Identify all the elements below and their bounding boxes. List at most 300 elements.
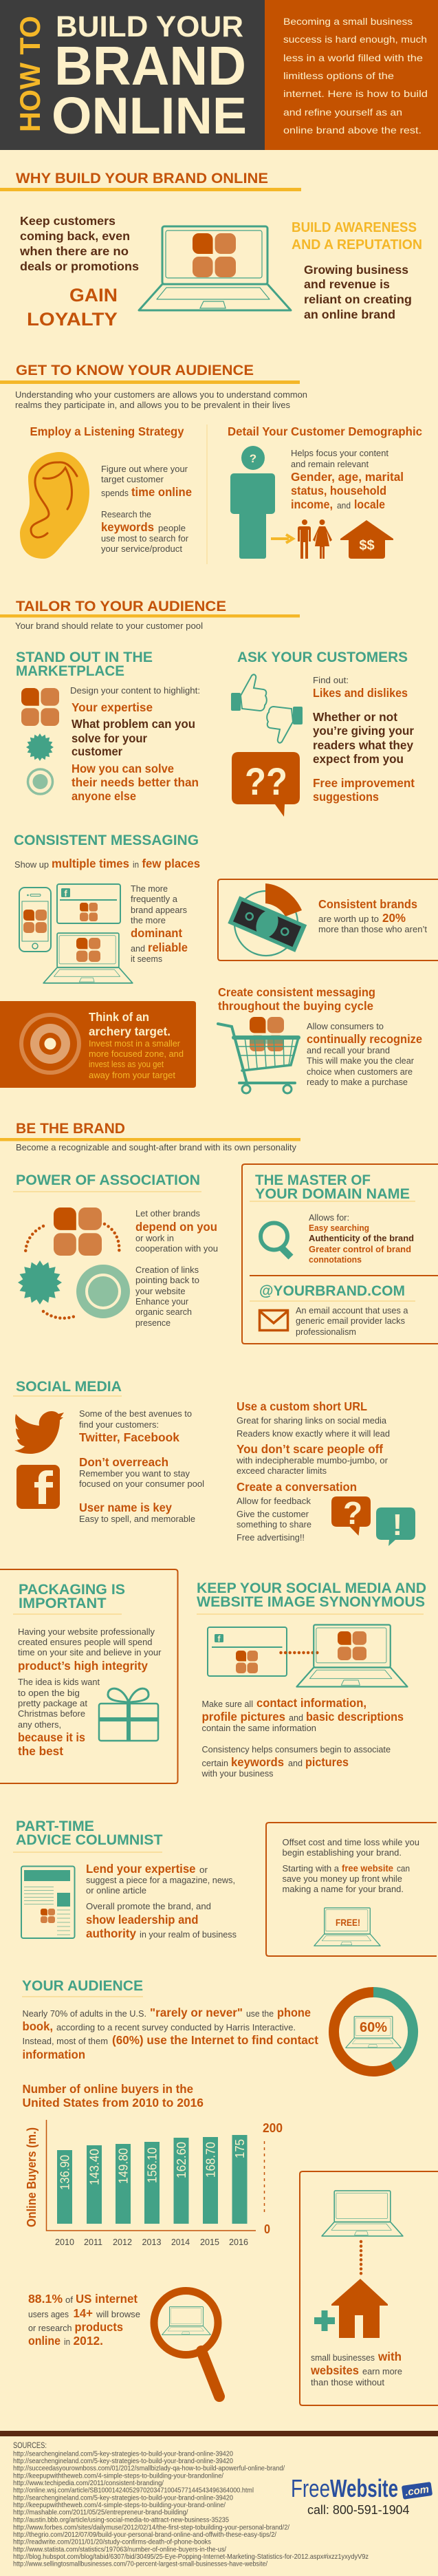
- sources list: http://www.statista.com/statistics/197063/number-of-online-buyers-in-the-us/: [13, 2545, 226, 2553]
- title: build your brand online: [52, 10, 247, 144]
- icon: envelope: [259, 1310, 288, 1331]
- text: ask customers: suggestions: [313, 790, 379, 804]
- text: stand out: customer: [72, 744, 122, 758]
- section: get to know your audience: [0, 363, 422, 564]
- heading: PACKAGING IS: [19, 1582, 125, 1598]
- text: social avenues: Easy to spell, and memorable: [79, 1514, 195, 1524]
- footer: [0, 2431, 438, 2568]
- icon: person with question mark: ?: [250, 452, 256, 465]
- logo: freewebsite.com: .com: [404, 2484, 430, 2498]
- text: growing business: an online brand: [304, 308, 395, 321]
- intro text: limitless options of the: [283, 70, 394, 81]
- text: social avenues: Twitter, Facebook: [79, 1430, 179, 1444]
- sources list: http://searchengineland.com/5-key-strategies-to-build-your-brand-online-39420: [13, 2493, 233, 2502]
- chart heading: [22, 2082, 204, 2110]
- intro text: Understanding who your customers are allows you to understand common: [15, 389, 307, 400]
- sources list: http://blog.hubspot.com/blog/tabid/6307/bid/30495/25-Eye-Popping-Internet-Marketing-Statistics-for-2012.aspx#ixzz1yxydyV9z: [13, 2553, 369, 2561]
- text: stand out: Design your content to highlight:: [70, 685, 200, 696]
- sources list: http://www.sellingtosmallbusinesses.com/70-percent-largest-small-businesses-have-website/: [13, 2560, 267, 2568]
- panel: small business websites: [300, 2171, 438, 2405]
- bar chart: online buyers: [25, 2120, 283, 2247]
- text: custom url and conversation: something to share: [237, 1519, 311, 1530]
- text: advice: [86, 1862, 237, 1940]
- sources list: http://www.techipedia.com/2011/consistent-branding/: [13, 2479, 164, 2487]
- connector dots: [360, 2242, 362, 2274]
- text: packaging: created ensures people will spend: [18, 1637, 153, 1647]
- text: archery: archery target.: [89, 1024, 171, 1038]
- text: packaging: product’s high integrity: [18, 1659, 148, 1673]
- years: [55, 2237, 248, 2247]
- intro text: success is hard enough, much: [283, 34, 427, 45]
- text: phone book stat: Nearly 70% of adults in the U.S.: [22, 2008, 146, 2019]
- text: association: presence: [135, 1318, 171, 1328]
- text: ask customers: [313, 675, 415, 804]
- text: ask customers: Free improvement: [313, 776, 415, 790]
- icon: newspaper: [21, 1866, 74, 1938]
- text: ask customers: readers what they: [313, 738, 413, 752]
- text: consistent brands: more than those who aren’t: [318, 924, 427, 934]
- icon: logo connected to partners: [18, 1208, 125, 1318]
- years: 2013: [142, 2237, 161, 2247]
- icon: magnifying glass: [261, 1223, 291, 1257]
- connector dots: [281, 1651, 318, 1654]
- text: gain loyalty: GAIN: [69, 285, 118, 305]
- sources list: SOURCES:: [13, 2442, 47, 2450]
- text: listening strategy: use most to search for: [101, 533, 189, 544]
- years: 2010: [55, 2237, 74, 2247]
- sources list: http://austin.bbb.org/article/using-social-media-to-attract-new-business-35235: [13, 2516, 229, 2524]
- text: internet users stat: US internet: [76, 2292, 138, 2306]
- icon: facebook window: f: [217, 1634, 221, 1644]
- icon: laptop: [322, 2191, 403, 2236]
- text: internet users stat: will browse: [96, 2309, 140, 2319]
- text: phone book stat: (60%) use the Internet to find contact: [112, 2033, 318, 2047]
- text: custom url and conversation: Readers know exactly where it will lead: [237, 1428, 390, 1439]
- text: phone book stat: book,: [22, 2019, 53, 2033]
- icon: thumbs up: [231, 674, 267, 711]
- text: free website: Starting with a: [282, 1863, 340, 1874]
- header panel: [0, 0, 438, 150]
- icon: question bubble: ?: [343, 1495, 362, 1531]
- intro text: Become a recognizable and sought-after brand with its own personality: [16, 1142, 296, 1152]
- heading: buying cycle: [218, 985, 375, 1013]
- icon: twitter bird: [14, 1411, 64, 1454]
- icon: facebook window: f: [64, 888, 67, 899]
- text: listening strategy: your service/product: [101, 544, 182, 554]
- text: demographic: locale: [354, 497, 385, 511]
- sources list: http://readwrite.com/2011/01/20/study-confirms-death-of-phone-books: [13, 2538, 211, 2546]
- heading: buying cycle: Create consistent messaging: [218, 985, 375, 999]
- text: custom url and conversation: You don’t scare people off: [237, 1442, 383, 1456]
- text: phone book stat: phone: [277, 2006, 311, 2019]
- chart heading: Number of online buyers in the: [22, 2082, 193, 2096]
- chart: 60 percent donut: 60%: [360, 2020, 387, 2035]
- panel: domain name: [242, 1164, 438, 1344]
- text: listening strategy: spends: [101, 488, 129, 498]
- text: frequency: frequently a: [131, 894, 178, 904]
- text: social avenues: Some of the best avenues to: [79, 1408, 192, 1419]
- text: listening strategy: Figure out where your: [101, 464, 188, 474]
- text: same information: contain the same information: [202, 1723, 316, 1733]
- text: same information: profile pictures: [202, 1710, 285, 1724]
- heading: WEBSITE IMAGE SYNONYMOUS: [197, 1594, 425, 1610]
- panel: consistent brands: [218, 879, 438, 960]
- text: stand out: [70, 685, 200, 803]
- text: same information: pictures: [305, 1755, 349, 1769]
- text: allows for: [309, 1212, 414, 1265]
- heading: [197, 1580, 426, 1610]
- icon: phone: [19, 888, 51, 952]
- heading: domain: YOUR DOMAIN NAME: [255, 1186, 410, 1202]
- heading: [19, 1582, 125, 1611]
- heading: domain: [255, 1172, 410, 1202]
- text: social avenues: focused on your consumer pool: [79, 1479, 204, 1489]
- years: 2011: [84, 2237, 102, 2247]
- text: listening strategy: target customer: [101, 474, 164, 484]
- text: buying cycle: and recall your brand: [307, 1045, 390, 1055]
- text: internet users stat: users ages: [28, 2309, 69, 2319]
- icon: ear: [20, 452, 89, 559]
- text: phone book stat: according to a recent survey conducted by Harris Interactive.: [56, 2022, 296, 2032]
- text: same information: [201, 1696, 404, 1779]
- heading: stand out: [16, 650, 153, 679]
- section: consistent messaging: [0, 833, 438, 1093]
- text: same information: basic descriptions: [306, 1710, 404, 1724]
- text: advice: in your realm of business: [140, 1929, 237, 1940]
- text: gain loyalty: LOYALTY: [27, 309, 118, 330]
- sources list: http://searchengineland.com/5-key-strategies-to-build-your-brand-online-39420: [13, 2457, 233, 2465]
- subheading: listening: Employ a Listening Strategy: [30, 425, 184, 438]
- text: allows for: connotations: [309, 1254, 362, 1265]
- title: build your brand online: BUILD YOUR: [56, 10, 243, 43]
- text: free website: begin establishing your brand.: [282, 1847, 402, 1858]
- icon: laptop free: [314, 1908, 380, 1946]
- text: custom url and conversation: Give the customer: [237, 1509, 309, 1519]
- text: social avenues: Remember you want to stay: [79, 1468, 190, 1479]
- years: 2012: [113, 2237, 132, 2247]
- text: social avenues: User name is key: [79, 1501, 172, 1514]
- heading: CONSISTENT MESSAGING: [14, 833, 199, 848]
- text: consistent brands: Consistent brands: [318, 897, 417, 911]
- heading: PART-TIME: [16, 1818, 94, 1834]
- icon: house with money: $$: [359, 538, 375, 553]
- text: frequency: [131, 883, 188, 964]
- text: frequency: dominant: [131, 926, 182, 940]
- icon: shopping cart with logo: [218, 1017, 298, 1093]
- icon: laptop: [43, 933, 133, 983]
- intro text: and refine yourself as an: [283, 107, 402, 118]
- text: stand out: How you can solve: [72, 762, 174, 775]
- text: buying cycle: ready to make a purchase: [307, 1077, 408, 1087]
- icon: exclamation bubble: !: [393, 1508, 402, 1542]
- years: 2016: [229, 2237, 248, 2247]
- subheading: [14, 857, 200, 870]
- text: small businesses: with: [377, 2350, 402, 2363]
- text: demographic: Helps focus your content: [291, 448, 388, 458]
- intro text: Becoming a small business: [283, 16, 413, 27]
- text: buying cycle: This will make you the clear: [307, 1055, 415, 1066]
- text: same information: Make sure all: [202, 1699, 253, 1709]
- text: listening strategy: keywords: [101, 520, 154, 534]
- intro text: online brand above the rest.: [283, 125, 421, 136]
- text: custom url and conversation: Create a conversation: [237, 1480, 357, 1494]
- text: association: cooperation with you: [135, 1243, 218, 1254]
- section: your audience: [22, 1978, 438, 2405]
- icon: house with plus: [314, 2279, 388, 2338]
- heading: BE THE BRAND: [16, 1121, 125, 1137]
- text: frequency: it seems: [131, 954, 162, 964]
- text: packaging: [18, 1627, 162, 1758]
- text: packaging: The idea is kids want: [18, 1677, 100, 1687]
- text: free website: Offset cost and time loss while you: [282, 1837, 419, 1847]
- icon: gift box: [98, 1688, 158, 1741]
- icon: question speech bubble: [232, 752, 300, 817]
- bar values: 136.90: [58, 2155, 72, 2190]
- text: phone book stat: information: [22, 2048, 85, 2061]
- text: internet users stat: products: [74, 2320, 123, 2334]
- sources list: http://searchengineland.com/5-key-strategies-to-build-your-brand-online-39420: [13, 2449, 233, 2458]
- text: listening strategy: Research the: [101, 509, 151, 519]
- text: association: depend on you: [135, 1220, 217, 1234]
- text: build awareness: [292, 220, 422, 253]
- chart: 60 percent donut: [334, 1993, 413, 2071]
- heading: stand out: MARKETPLACE: [16, 663, 124, 679]
- text: listening strategy: people: [158, 523, 186, 533]
- text: custom url and conversation: exceed character limits: [237, 1466, 327, 1476]
- text: archery: Invest most in a smaller: [89, 1038, 181, 1049]
- bar values: 149.80: [117, 2148, 131, 2184]
- text: allows for: Easy searching: [309, 1223, 369, 1233]
- bar values: 143.40: [88, 2149, 102, 2185]
- text: demographic: status, household: [291, 484, 386, 497]
- text: growing business: [304, 263, 412, 321]
- text: association: pointing back to: [135, 1275, 199, 1285]
- text: stand out: their needs better than: [72, 775, 199, 789]
- text: association: Enhance your: [135, 1296, 189, 1307]
- text: advice: show leadership and: [86, 1913, 198, 1926]
- text: consistent brands: are worth up to: [318, 914, 379, 924]
- sources list: http://keepupwiththeweb.com/4-simple-steps-to-building-your-brand-online/: [13, 2501, 226, 2509]
- bar values: 162.60: [175, 2142, 188, 2178]
- text: buying cycle: Allow consumers to: [307, 1021, 384, 1031]
- text: ask customers: you’re giving your: [313, 724, 414, 738]
- text: internet users stat: [28, 2292, 140, 2348]
- text: allows for: Authenticity of the brand: [309, 1233, 414, 1243]
- text: phone book stat: Instead, most of them: [22, 2036, 108, 2046]
- text: keep customers: [19, 214, 139, 273]
- text: same information: and: [288, 1758, 303, 1768]
- logo: freewebsite.com: Free: [291, 2474, 330, 2502]
- text: packaging: to open the big: [18, 1688, 80, 1698]
- text: email: professionalism: [296, 1327, 356, 1337]
- text: listening strategy: [101, 464, 192, 554]
- text: free website: free website: [342, 1863, 393, 1874]
- text: free website: making a name for your brand.: [282, 1884, 404, 1894]
- intro text: less in a world filled with the: [283, 52, 423, 63]
- years: 2014: [171, 2237, 190, 2247]
- arrow: [271, 535, 293, 543]
- scale: 200: [263, 2121, 283, 2135]
- sources list: http://online.wsj.com/article/SB10001424052970203471004577144543496364000.html: [13, 2487, 254, 2495]
- intro text: [283, 16, 428, 136]
- text: custom url and conversation: Free advertising!!: [237, 1532, 305, 1543]
- text: internet users stat: 14+: [73, 2306, 93, 2320]
- text: social avenues: Don’t overreach: [79, 1455, 168, 1469]
- text: small businesses: [310, 2350, 402, 2387]
- text: same information: and: [289, 1713, 303, 1723]
- text: advice: or: [199, 1865, 208, 1875]
- section: part-time advice columnist: [13, 1818, 437, 1956]
- text: listening strategy: time online: [131, 485, 192, 499]
- icon: question bubble: [331, 1495, 371, 1536]
- text: association: organic search: [135, 1307, 192, 1317]
- text: demographic: income,: [291, 497, 333, 511]
- text: advice: or online article: [86, 1885, 146, 1896]
- bar values: 168.70: [204, 2142, 217, 2178]
- text: internet users stat: in: [64, 2337, 70, 2347]
- text: association: Creation of links: [135, 1265, 199, 1275]
- heading: TAILOR TO YOUR AUDIENCE: [16, 599, 226, 614]
- subheading: multiple times: [52, 857, 129, 870]
- text: free website: [282, 1837, 419, 1894]
- text: growing business: Growing business: [304, 263, 408, 277]
- text: stand out: Your expertise: [72, 700, 153, 714]
- text: internet users stat: or research: [28, 2323, 72, 2333]
- text: phone book stat: "rarely or never": [150, 2006, 243, 2019]
- text: buying cycle: continually recognize: [307, 1032, 422, 1046]
- heading: GET TO KNOW YOUR AUDIENCE: [16, 363, 254, 378]
- text: frequency: and: [131, 943, 145, 954]
- text: email: [296, 1305, 408, 1337]
- heading: YOUR AUDIENCE: [22, 1978, 143, 1994]
- icon: laptop with brand logo: [139, 226, 291, 310]
- text: association: [135, 1208, 218, 1328]
- icon: man and woman: [298, 519, 332, 559]
- subheading: Show up: [14, 859, 49, 870]
- sources list: http://succeedasyourownboss.com/01/2012/smallbizlady-qa-how-to-build-apowerful-online-brand/: [13, 2465, 285, 2473]
- icon: person with question mark: [230, 446, 275, 559]
- icon: question speech bubble: ??: [245, 760, 287, 803]
- text: association: your website: [135, 1286, 186, 1296]
- text: demographic: Gender, age, marital: [291, 470, 404, 484]
- intro text: realms they participate in, and allows you to be prevalent in their lives: [15, 400, 290, 410]
- heading: IMPORTANT: [19, 1596, 107, 1611]
- sources list: [13, 2442, 369, 2568]
- text: allows for: Allows for:: [309, 1212, 349, 1223]
- text: frequency: the more: [131, 915, 166, 925]
- text: internet users stat: online: [28, 2334, 61, 2348]
- text: packaging: pretty package at: [18, 1698, 87, 1708]
- text: advice: authority: [86, 1926, 136, 1940]
- text: phone book stat: [22, 2006, 318, 2061]
- icon: dollar bill: [228, 896, 307, 952]
- section: why build your brand online: [0, 171, 422, 330]
- text: internet users stat: 88.1%: [28, 2292, 63, 2306]
- bar values: 175: [233, 2139, 247, 2158]
- icon: magnifier over laptop: [154, 2291, 219, 2396]
- years: 2015: [200, 2237, 219, 2247]
- text: same information: Consistency helps consumers begin to associate: [202, 1744, 391, 1754]
- text: packaging: any others,: [18, 1719, 61, 1730]
- text: same information: contact information,: [256, 1696, 366, 1710]
- text: small businesses: small businesses: [311, 2352, 375, 2363]
- title: build your brand online: BRAND: [54, 35, 246, 96]
- icon: facebook window: [208, 1627, 287, 1676]
- text: demographic: [291, 448, 404, 511]
- heading: buying cycle: throughout the buying cycle: [218, 999, 373, 1013]
- text: growing business: reliant on creating: [304, 292, 412, 306]
- text: same information: keywords: [231, 1755, 284, 1769]
- icon: facebook: [17, 1465, 60, 1509]
- text: archery: [89, 1010, 184, 1080]
- icon: house with money: [340, 520, 393, 559]
- icon: facebook window: [57, 884, 120, 923]
- call to action: call: 800-591-1904: [307, 2503, 410, 2517]
- bar values: [58, 2139, 247, 2190]
- text: consistent brands: [318, 897, 427, 934]
- text: free website: can: [397, 1863, 410, 1874]
- text: keep customers: coming back, even: [20, 229, 130, 243]
- text: ask customers: Likes and dislikes: [313, 686, 408, 700]
- text: custom url and conversation: Allow for feedback: [237, 1496, 311, 1506]
- text: social avenues: [79, 1408, 204, 1524]
- chart heading: United States from 2010 to 2016: [22, 2096, 204, 2110]
- subheading: few places: [142, 857, 200, 870]
- text: custom url and conversation: with indecipherable mumbo-jumbo, or: [236, 1455, 388, 1466]
- text: allows for: Greater control of brand: [309, 1244, 411, 1254]
- section: keep social media and website synonymous: [197, 1580, 426, 1779]
- heading: stand out: STAND OUT IN THE: [16, 650, 153, 665]
- heading: ADVICE COLUMNIST: [16, 1832, 163, 1848]
- subheading: in: [133, 859, 139, 870]
- text: gain loyalty: [27, 285, 118, 330]
- title: how to: HOW TO: [14, 16, 46, 132]
- intro text: internet. Here is how to build: [283, 88, 428, 99]
- text: build awareness: AND A REPUTATION: [292, 237, 422, 253]
- text: build awareness: BUILD AWARENESS: [292, 220, 417, 235]
- text: ask customers: expect from you: [313, 752, 404, 766]
- bar values: 156.10: [146, 2147, 160, 2183]
- text: packaging: Christmas before: [18, 1708, 85, 1719]
- text: internet users stat: 2012.: [73, 2334, 103, 2348]
- sources list: http://www.forbes.com/sites/dailymuse/2012/02/14/the-first-step-tobuilding-your-personal-brand/2/: [13, 2523, 289, 2531]
- text: keep customers: deals or promotions: [20, 259, 139, 273]
- icon: thumbs down: [267, 707, 303, 743]
- title: build your brand online: ONLINE: [52, 87, 247, 144]
- text: demographic: and: [337, 500, 351, 511]
- text: frequency: brand appears: [131, 905, 187, 915]
- logo: freewebsite.com: Website: [330, 2474, 398, 2502]
- text: consistent brands: 20%: [382, 911, 406, 925]
- chart: ring with wedge: [234, 883, 302, 956]
- heading: [16, 1818, 163, 1848]
- text: keep customers: when there are no: [19, 244, 129, 258]
- icon: target circle: [28, 769, 52, 794]
- text: advice: Lend your expertise: [86, 1862, 196, 1876]
- text: custom url and conversation: [236, 1399, 390, 1543]
- icon: target: [21, 1015, 79, 1073]
- icon: laptop: [296, 1624, 408, 1687]
- text: packaging: time on your site and believe in your: [18, 1647, 162, 1657]
- text: social avenues: find your customers:: [79, 1419, 159, 1430]
- icon: exclamation bubble: [376, 1507, 415, 1546]
- panel: archery target: [0, 1001, 196, 1088]
- text: advice: suggest a piece for a magazine, news,: [86, 1875, 235, 1885]
- text: keep customers: Keep customers: [20, 214, 116, 228]
- scale: 0: [264, 2222, 270, 2236]
- subheading: demographic: Detail Your Customer Demographic: [228, 425, 422, 438]
- icon: starburst: [26, 733, 54, 761]
